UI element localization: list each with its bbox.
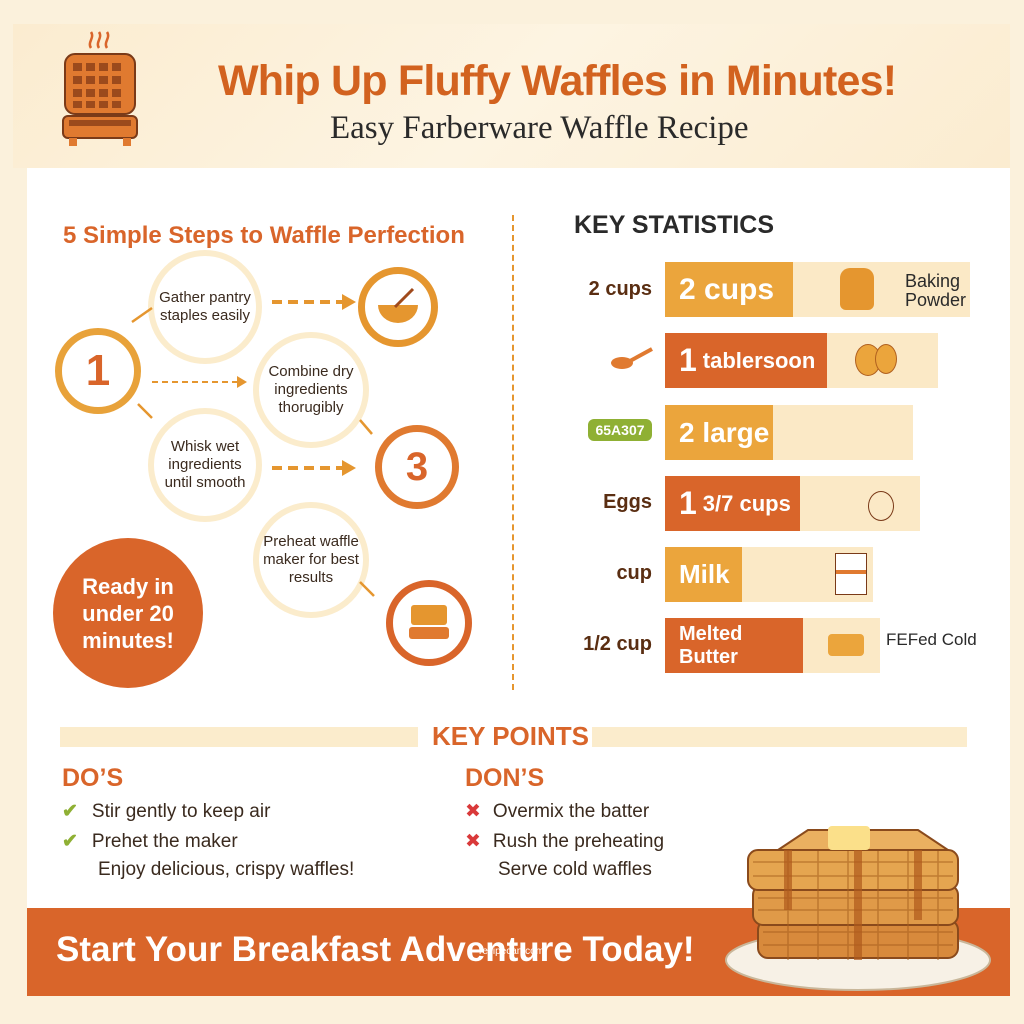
panel: key statistics: Eggs bbox=[603, 491, 652, 513]
subtitle: Easy Farberware Waffle Recipe bbox=[330, 110, 749, 146]
do's: ✔ Prehet the maker bbox=[62, 831, 238, 852]
panel: key statistics: FEFed Cold bbox=[886, 630, 977, 649]
main panel bbox=[27, 168, 1010, 908]
step 1 number: 1 bbox=[86, 346, 110, 395]
panel: key statistics: 1/2 cup bbox=[583, 633, 652, 655]
icon: bowl bbox=[358, 267, 438, 347]
do's: ✔ Stir gently to keep air bbox=[62, 801, 270, 822]
arrows bbox=[131, 294, 375, 597]
step: gather: Gather pantry staples easily bbox=[159, 289, 251, 324]
bar 1: Baking bbox=[905, 271, 960, 291]
badge bbox=[588, 419, 652, 441]
bar 3 bbox=[665, 405, 913, 460]
step: whisk bbox=[148, 408, 262, 522]
bar 1: 2 cups bbox=[679, 272, 774, 306]
step: preheat bbox=[253, 502, 369, 618]
icon: waffle maker bbox=[62, 31, 138, 146]
callout: ready: Ready in bbox=[82, 574, 174, 598]
icon: spoon bbox=[611, 347, 653, 369]
bar 2: tablersoon bbox=[703, 348, 815, 372]
bar 2: 1 bbox=[679, 342, 697, 378]
badge: 65A307 bbox=[595, 422, 645, 438]
panel: key statistics bbox=[574, 211, 977, 673]
key points heading: KEY POINTS bbox=[432, 721, 589, 751]
footer banner: Start Your Breakfast Adventure Today! bbox=[56, 930, 695, 969]
bar 6: Butter bbox=[679, 646, 738, 668]
header band bbox=[13, 24, 1010, 168]
bar 6: Melted bbox=[679, 622, 742, 644]
callout: ready: minutes! bbox=[82, 628, 174, 652]
step: preheat: Preheat waffle maker for best results bbox=[263, 533, 359, 586]
bar 4 bbox=[665, 476, 920, 531]
callout: ready bbox=[53, 538, 203, 688]
bar 2 bbox=[665, 333, 938, 388]
panel: key statistics: 2 cups bbox=[589, 278, 652, 300]
do's: DO’S bbox=[62, 764, 123, 792]
don'ts bbox=[465, 764, 664, 880]
bar 6 bbox=[665, 618, 880, 673]
don'ts: ✖ Overmix the batter bbox=[465, 801, 649, 822]
bar 3: 2 large bbox=[679, 416, 769, 448]
title: Whip Up Fluffy Waffles in Minutes! bbox=[218, 57, 896, 105]
divider bbox=[512, 215, 514, 690]
step: combine: Combine dry ingredients thorugibly bbox=[268, 363, 354, 416]
step: gather bbox=[148, 250, 262, 364]
don'ts: ✖ Rush the preheating bbox=[465, 831, 664, 852]
stats heading: KEY STATISTICS bbox=[574, 211, 774, 239]
bar 5 bbox=[665, 547, 873, 602]
icon: waffle maker step bbox=[386, 580, 472, 666]
steps heading: 5 Simple Steps to Waffle Perfection bbox=[63, 222, 465, 249]
panel: key statistics: cup bbox=[616, 562, 652, 584]
don'ts: Serve cold waffles bbox=[498, 859, 652, 880]
illustration: waffle stack bbox=[725, 826, 991, 991]
panel: steps bbox=[53, 222, 472, 688]
footer banner bbox=[27, 908, 1010, 996]
don'ts: DON’S bbox=[465, 764, 544, 792]
bar 4: 3/7 cups bbox=[703, 490, 791, 516]
key points heading bbox=[60, 721, 967, 751]
do's bbox=[62, 764, 354, 880]
step: whisk: Whisk wet ingredients until smooth bbox=[165, 438, 245, 491]
step: combine bbox=[253, 332, 369, 448]
icon: step 3: 3 bbox=[406, 444, 428, 488]
bar 1: Powder bbox=[905, 290, 966, 310]
step 1 number bbox=[55, 328, 141, 414]
icon: step 3 bbox=[375, 425, 459, 509]
bar 5: Milk bbox=[679, 559, 730, 589]
bar 4: 1 bbox=[679, 485, 697, 521]
bar 1 bbox=[665, 262, 970, 317]
footer banner: recipecan.com bbox=[479, 946, 544, 957]
callout: ready: under 20 bbox=[82, 600, 174, 626]
do's: Enjoy delicious, crispy waffles! bbox=[98, 859, 354, 880]
